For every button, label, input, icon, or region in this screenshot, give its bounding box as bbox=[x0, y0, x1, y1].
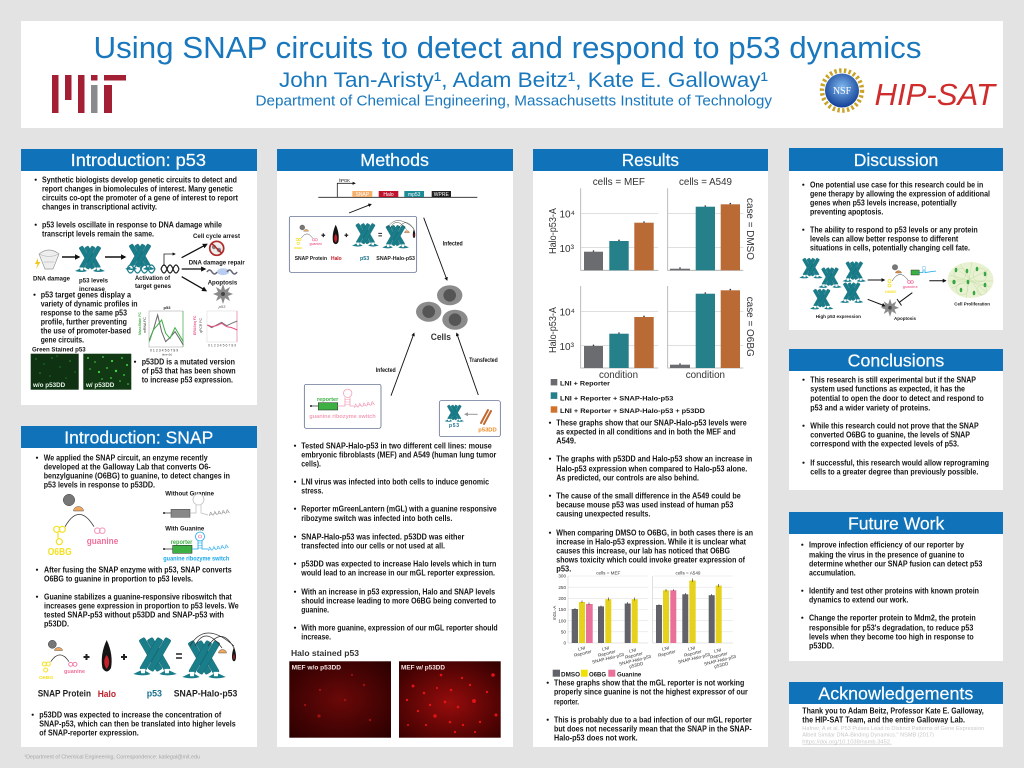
heading: Discussion bbox=[789, 148, 1003, 171]
text block: target genes: response to the same p53 bbox=[41, 308, 128, 318]
chart: mGL reporter bars: cells = A549 bbox=[676, 570, 701, 576]
pathway labels bbox=[33, 233, 245, 293]
text block: methods bullets: would lead to an increase in our mGL reporter expression. bbox=[300, 568, 495, 578]
panel: Conclusions bbox=[789, 349, 1003, 490]
text block: results bullets: These graphs show that our SNAP-Halo-p53 levels were bbox=[556, 418, 747, 428]
bars: O6BG row bbox=[584, 289, 740, 368]
text block: reference bbox=[802, 726, 984, 746]
legend: treatments: Guanine bbox=[617, 672, 641, 679]
text block: discussion bullets: The ability to respond to p53 levels or any protein bbox=[810, 226, 978, 234]
text block: conclusions bullets: While this research could not prove that the SNAP bbox=[810, 422, 979, 430]
chart: p53 versus ERASeq line chart: ERASeq FC bbox=[193, 315, 197, 335]
text block: p53DD expected bbox=[32, 710, 236, 738]
chart: Halo-p53 bars: Halo-p53-A bbox=[548, 208, 559, 254]
diagram: riboswitch states: With Guanine bbox=[165, 526, 204, 532]
image: MEF with p53DD bbox=[399, 661, 501, 738]
chart: mGL reporter bars: Reporter bbox=[710, 651, 729, 660]
box: p53DD: p53DD bbox=[478, 428, 497, 434]
text block: SNAP circuit: p53 levels in response to p53DD. bbox=[44, 480, 155, 490]
legend: conditions: LNI + Reporter + SNAP-Halo-p53 bbox=[560, 396, 674, 402]
text block: methods bullets: guanine. bbox=[301, 606, 329, 614]
panel: Introduction p53 bbox=[21, 149, 257, 405]
box: SNAP-Halo-p53 fusion: O6BG bbox=[294, 246, 303, 250]
authors: John Tan-Aristy¹, Adam Beitz¹, Kate E. Galloway¹ bbox=[279, 69, 768, 92]
text block: target genes: p53 target genes display a bbox=[41, 290, 132, 300]
text block: fusing and riboswitch bbox=[36, 566, 239, 628]
bars: MEF facet bbox=[572, 599, 638, 643]
diagram: SNAP converts O6BG to guanine bbox=[48, 494, 118, 558]
text block: conclusions bullets: If successful, this research would allow reprograming bbox=[810, 458, 989, 468]
chart: mGL reporter bars: Reporter bbox=[658, 649, 677, 658]
text block: reference: Albeit Similar DNA-Binding Dynamics." NSMB (2017) bbox=[802, 732, 934, 738]
chart: p53 versus MDM2 line chart: MascStain FC bbox=[138, 312, 142, 335]
text block: results bullets: The cause of the small difference in the A549 could be bbox=[556, 492, 741, 500]
heading: Discussion: Discussion bbox=[854, 150, 938, 170]
text block: reference: Hafner, A et al. P53 Pulses Lead to Distinct Patterns of Gene Expression bbox=[802, 726, 984, 732]
arrow: construct to protein bbox=[349, 204, 371, 213]
chart: p53 versus MDM2 line chart bbox=[138, 305, 183, 356]
chart: mGL reporter bars: LNI bbox=[578, 645, 586, 652]
label: Infected: Infected bbox=[443, 240, 463, 248]
chart: Halo-p53 bars bbox=[548, 177, 755, 381]
chart: mGL reporter bars: 100 bbox=[558, 618, 566, 623]
icon: apoptosis bbox=[881, 299, 899, 317]
text block: mGL reporter conclusions: reporter. bbox=[554, 698, 579, 706]
arrow: to cell cycle arrest bbox=[182, 244, 207, 258]
arrow: to DNA repair bbox=[182, 268, 205, 270]
chart: mGL reporter bars: SNAP-Halo-p53 bbox=[619, 654, 652, 667]
text block: p53DD definition: to increase p53 expression. bbox=[142, 376, 233, 384]
panel: Methods bbox=[277, 149, 513, 747]
text block: future work bullets: making the virus in the presence of guanine to bbox=[809, 550, 965, 560]
footnote: ¹Department of Chemical Engineering, Correspondence: katiegal@mit.edu bbox=[24, 754, 200, 760]
legend: conditions: LNI + Reporter + SNAP-Halo-p53 + p53DD bbox=[560, 408, 705, 415]
text block: intro bullets top bbox=[35, 176, 238, 238]
diagram: plasmid construct: WPRE bbox=[434, 192, 449, 198]
diagram: riboswitch states: AAAAA bbox=[207, 544, 229, 553]
text block: intro bullets top: report changes in biomolecules of interest. Many genetic bbox=[42, 184, 234, 194]
icon: DNA damage repair bbox=[207, 268, 237, 275]
chart: mGL reporter bars bbox=[552, 570, 738, 671]
chart: p53 versus MDM2 line chart: mRNA FC bbox=[143, 317, 147, 333]
icon: NSF logo: NSF bbox=[833, 86, 852, 97]
inhibition line bbox=[897, 293, 912, 306]
box: SNAP-Halo-p53 fusion: Halo bbox=[331, 256, 342, 262]
panel: Discussion bbox=[789, 148, 1003, 330]
diagram: riboswitch states: AAAAA bbox=[208, 509, 230, 518]
text block: methods bullets: LNI virus was infected into both cells to induce genomic bbox=[301, 478, 490, 486]
legend: treatments bbox=[553, 670, 641, 679]
text block: results bullets: A549. bbox=[556, 436, 576, 446]
diagram: plasmid construct: SNAP bbox=[355, 192, 370, 198]
text block: results bullets bbox=[549, 418, 753, 574]
header panel bbox=[21, 21, 1003, 128]
heading: Introduction SNAP: Introduction: SNAP bbox=[64, 428, 213, 448]
diagram: SNAP converts O6BG to guanine: guanine bbox=[87, 536, 118, 547]
heading: Acknowledgements bbox=[789, 682, 1003, 704]
text block: future work bullets: levels when they become too high in response to bbox=[809, 632, 974, 642]
text block: methods bullets bbox=[294, 442, 498, 642]
text block: intro bullets top: circuits co-opt the promoter of a gene of interest to report bbox=[42, 194, 238, 202]
pathway labels: increase bbox=[79, 286, 105, 293]
panel: Acknowledgements bbox=[789, 682, 1003, 747]
diagram: p53 pathway bbox=[33, 233, 245, 304]
diagram: plasmid construct: Halo bbox=[383, 192, 394, 198]
text block: results bullets: increase in Halo-p53 expression. While it is unclear what bbox=[556, 538, 746, 546]
arrow: reporter infected bbox=[391, 333, 414, 396]
image: green stain with p53DD bbox=[83, 354, 131, 390]
text block: intro bullets top: changes in transcriptional activity. bbox=[42, 202, 157, 212]
text block: p53DD definition bbox=[134, 358, 236, 384]
box: p53DD: p53 bbox=[449, 423, 459, 429]
text block: discussion bullets: preventing apoptosis. bbox=[810, 208, 883, 216]
box: reporter: AAAAA bbox=[353, 401, 375, 410]
text block: results bullets: causing unexpected results. bbox=[556, 510, 650, 518]
pathway labels: target genes bbox=[135, 283, 171, 290]
diagram labels: Cell Proliferation bbox=[954, 302, 990, 306]
text block: target genes: profile, further preventing bbox=[41, 318, 127, 326]
chart: mGL reporter bars: SNAP-Halo-p53 bbox=[704, 654, 737, 667]
chart: p53 versus ERASeq line chart: qPCR FC bbox=[199, 318, 203, 333]
box: p53DD bbox=[439, 401, 500, 437]
text block: methods bullets: SNAP-Halo-p53 was infected. p53DD was either bbox=[301, 532, 464, 542]
text block: thanks bbox=[802, 706, 984, 724]
chart: mGL reporter bars: 200 bbox=[558, 596, 566, 601]
heading: Introduction SNAP bbox=[21, 426, 257, 448]
legend: conditions: LNI + Reporter bbox=[560, 380, 610, 388]
text block: intro bullets top: Synthetic biologists develop genetic circuits to detect and bbox=[42, 176, 237, 184]
chart: mGL reporter bars: mGL-A bbox=[552, 605, 557, 620]
text block: results bullets: causes this increase, our lab has noticed that O6BG bbox=[556, 546, 730, 556]
text block: conclusions bullets: system used functions as expected, it has the bbox=[810, 384, 966, 394]
panel: Results bbox=[533, 149, 768, 747]
diagram labels: Apoptosis bbox=[894, 316, 916, 321]
text block: fusing and riboswitch: O6BG to guanine in proportion to p53 levels. bbox=[44, 574, 193, 584]
bars: A549 facet bbox=[656, 580, 722, 643]
text block: methods bullets: With more guanine, expression of our mGL reporter should bbox=[301, 624, 498, 632]
arrow: to proliferation bbox=[929, 280, 946, 282]
heading: Conclusions bbox=[789, 349, 1003, 371]
text block: results bullets: p53. bbox=[556, 564, 571, 574]
icon: cell cycle arrest bbox=[210, 241, 224, 255]
chart: mGL reporter bars: 250 bbox=[558, 585, 566, 590]
text block: intro bullets top: transcript levels remain the same. bbox=[42, 230, 154, 238]
icon: cells: Cells bbox=[431, 332, 451, 342]
text block: results bullets: as expected in all conditions and in both the MEF and bbox=[556, 428, 736, 436]
diagram: riboswitch states bbox=[163, 490, 230, 562]
image: MEF without p53DD: MEF w/o p53DD bbox=[292, 666, 342, 672]
text block: reference: https://doi.org/10.1038/nsmb.3452. bbox=[802, 740, 892, 746]
diagram labels bbox=[816, 302, 990, 321]
text block: discussion bullets: levels can allow better response to different bbox=[810, 234, 959, 244]
text block: methods bullets: stress. bbox=[301, 486, 323, 496]
label: Halo stained p53: Halo stained p53 bbox=[291, 648, 359, 658]
box: reporter bbox=[304, 384, 381, 428]
icon: NSF logo bbox=[822, 70, 862, 110]
label: Transfected: Transfected bbox=[469, 357, 498, 364]
text block: p53DD definition: p53DD is a mutated version bbox=[142, 358, 235, 366]
chart: mGL reporter bars: Reporter bbox=[598, 649, 617, 658]
text block: discussion bullets bbox=[802, 180, 990, 252]
arrow: p53DD transfected bbox=[457, 333, 478, 395]
chart: p53 versus MDM2 line chart: 0 1 2 3 4 5 6 7 8 9 bbox=[150, 348, 178, 352]
text block: mGL reporter conclusions: properly since guanine is not the highest expressor of our bbox=[554, 688, 748, 696]
legend: conditions bbox=[551, 379, 705, 415]
text block: methods bullets: increase. bbox=[301, 632, 331, 642]
pathway labels: Activation of bbox=[135, 275, 171, 282]
text block: results bullets: When comparing DMSO to O6BG, in both cases there is an bbox=[556, 528, 753, 538]
text block: mGL reporter conclusions bbox=[547, 678, 752, 742]
icon: p53 tetramer bbox=[75, 246, 105, 272]
heading: Conclusions: Conclusions bbox=[848, 350, 945, 370]
chart: mGL reporter bars: SNAP-Halo-p53 bbox=[678, 652, 711, 665]
chart: Halo-p53 bars: condition bbox=[599, 370, 638, 381]
text block: results bullets: shows toxicity which could invoke greater expression of bbox=[556, 556, 745, 564]
text block: discussion bullets: gene therapy by allowing the expression of additional bbox=[810, 190, 990, 198]
pathway labels: Cell cycle arrest bbox=[193, 233, 241, 240]
diagram: SNAP plus Halo plus p53 fusion bbox=[38, 633, 237, 699]
text block: mGL reporter conclusions: These graphs show that the mGL reporter is not working bbox=[554, 678, 745, 688]
chart: Halo-p53 bars: 10⁴ bbox=[560, 308, 575, 319]
text block: fusing and riboswitch: increases gene expression in proportion to p53 levels. We bbox=[44, 602, 239, 610]
chart: mGL reporter bars: Reporter bbox=[625, 651, 644, 660]
text block: conclusions bullets: potential to open the door to detect and respond to bbox=[810, 394, 984, 403]
chart: p53 versus MDM2 line chart: time (h) bbox=[162, 352, 172, 356]
text block: methods bullets: transfected into our cells or not used at all. bbox=[301, 542, 445, 550]
text block: target genes bbox=[33, 290, 138, 344]
text block: future work bullets: determine whether our SNAP fusion can detect p53 bbox=[809, 560, 983, 568]
panel: Future Work bbox=[789, 512, 1003, 661]
legend: treatments: DMSO bbox=[561, 672, 580, 679]
chart: p53 versus ERASeq line chart: p53 bbox=[218, 304, 226, 309]
icon: SNAP circuit: O6BG bbox=[885, 290, 896, 294]
text block: future work bullets: Improve infection efficiency of our reporter by bbox=[809, 540, 965, 550]
text block: discussion bullets: situations in cells, potentially changing cell fate. bbox=[810, 244, 970, 252]
icon: MIT logo bbox=[52, 75, 126, 113]
chart: Halo-p53 bars: Halo-p53-A bbox=[548, 307, 559, 353]
chart: Halo-p53 bars: cells = A549 bbox=[679, 177, 732, 188]
heading: Future Work bbox=[789, 512, 1003, 534]
affiliation: Department of Chemical Engineering, Massachusetts Institute of Technology bbox=[256, 94, 773, 110]
text block: p53DD expected: p53DD was expected to increase the concentration of bbox=[39, 710, 222, 720]
chart: Halo-p53 bars: 10³ bbox=[560, 244, 575, 255]
text block: p53DD definition: of p53 that has been shown bbox=[142, 366, 236, 376]
text block: methods bullets: Tested SNAP-Halo-p53 in two different cell lines: mouse bbox=[301, 442, 492, 450]
icon: cells bbox=[416, 285, 468, 342]
chart: mGL reporter bars: SNAP-Halo-p53 bbox=[592, 652, 625, 665]
chart: mGL reporter bars: LNI bbox=[714, 647, 722, 654]
text block: discussion bullets: genes when p53 levels increase, potentially bbox=[810, 198, 957, 208]
arrow: to SNAP circuit bbox=[868, 279, 884, 281]
diagram: riboswitch states: Without Guanine bbox=[165, 490, 214, 498]
image: green stain without p53DD bbox=[31, 354, 79, 390]
chart: mGL reporter bars: LNI bbox=[602, 645, 610, 652]
heading: Results: Results bbox=[622, 150, 679, 170]
text block: conclusions bullets: cells to a greater degree than previously possible. bbox=[810, 468, 978, 476]
image: MEF with p53DD: MEF w/ p53DD bbox=[401, 666, 446, 672]
text block: SNAP circuit: developed at the Galloway Lab that converts O6- bbox=[44, 462, 211, 472]
legend: treatments: O6BG bbox=[589, 672, 606, 679]
pathway labels: DNA damage repair bbox=[189, 260, 245, 266]
icon: SNAP circuit bbox=[885, 264, 936, 294]
label: Green Stained p53: Green Stained p53 bbox=[32, 346, 86, 354]
chart: Halo-p53 bars: cells = MEF bbox=[593, 177, 645, 188]
box: SNAP-Halo-p53 fusion: SNAP-Halo-p53 bbox=[376, 256, 415, 262]
text block: results bullets: As predicted, our controls are also behind. bbox=[556, 474, 699, 482]
text block: thanks: Thank you to Adam Beitz, Professor Kate E. Galloway, bbox=[802, 706, 984, 716]
text block: methods bullets: Reporter mGreenLantern (mGL) with a guanine responsive bbox=[301, 504, 497, 514]
chart: mGL reporter bars: 50 bbox=[561, 630, 566, 634]
chart: mGL reporter bars: 150 bbox=[558, 607, 566, 612]
text block: methods bullets: embryonic fibroblasts (MEF) and A549 (human lung tumor bbox=[301, 450, 496, 460]
heading: Future Work: Future Work bbox=[848, 513, 945, 533]
diagram: SNAP plus Halo plus p53 fusion: SNAP-Halo-p53 bbox=[174, 688, 237, 698]
chart: Halo-p53 bars: 10³ bbox=[560, 342, 575, 353]
arrow: to apoptosis bbox=[182, 277, 206, 291]
text block: methods bullets: With an increase in p53 expression, Halo and SNAP levels bbox=[301, 588, 496, 596]
bars: DMSO row bbox=[584, 203, 740, 270]
diagram: SNAP plus Halo plus p53 fusion: guanine bbox=[64, 669, 85, 675]
text block: future work bullets: responsible for p53's degradation, to reduce p53 bbox=[809, 624, 974, 632]
chart: mGL reporter bars: cells = MEF bbox=[596, 570, 621, 576]
text block: conclusions bullets: correspond with the expected levels of p53. bbox=[810, 440, 959, 448]
chart: mGL reporter bars: p53DD bbox=[714, 661, 729, 669]
arrow bbox=[62, 256, 79, 258]
diagram: riboswitch states: reporter bbox=[171, 539, 193, 546]
diagram: gene therapy outcome bbox=[799, 258, 994, 321]
icon: p53 on DNA bbox=[125, 244, 179, 273]
chart: mGL reporter bars: LNI bbox=[688, 645, 696, 652]
diagram: riboswitch states: guanine ribozyme switch bbox=[163, 556, 229, 562]
text block: SNAP circuit: We applied the SNAP circuit, an enzyme recently bbox=[44, 454, 208, 462]
diagram labels: High p53 expression bbox=[816, 314, 861, 320]
text block: methods bullets: should increase leading to more O6BG being converted to bbox=[301, 596, 496, 606]
text block: p53DD expected: SNAP-p53, which can then be translated into higher levels bbox=[39, 720, 236, 728]
image: MEF without p53DD bbox=[289, 661, 391, 738]
title: Using SNAP circuits to detect and respond to p53 dynamics bbox=[94, 30, 922, 65]
diagram: plasmid construct: mp53 bbox=[408, 192, 421, 198]
text block: intro bullets top: p53 levels oscillate in response to DNA damage while bbox=[42, 220, 223, 230]
diagram: SNAP plus Halo plus p53 fusion: p53 bbox=[147, 688, 162, 698]
arrow: infected to cells bbox=[424, 218, 447, 280]
logo: HIP-SAT: HIP-SAT bbox=[874, 77, 997, 112]
box: SNAP-Halo-p53 fusion: guanine bbox=[310, 242, 322, 246]
text block: target genes: variety of dynamic profiles in bbox=[41, 300, 138, 308]
icon: proliferating cells bbox=[948, 262, 994, 298]
diagram: SNAP plus Halo plus p53 fusion: Halo bbox=[98, 689, 116, 699]
text block: SNAP circuit: benzylguanine (O6BG) to guanine, to detect changes in bbox=[44, 472, 230, 480]
diagram: plasmid construct bbox=[318, 178, 477, 198]
text block: conclusions bullets: p53 and a wider variety of proteins. bbox=[810, 404, 930, 412]
box: SNAP-Halo-p53 fusion: p53 bbox=[360, 256, 369, 262]
diagram: SNAP plus Halo plus p53 fusion: SNAP Protein bbox=[38, 688, 91, 698]
text block: p53DD expected: of SNAP-reporter expression. bbox=[39, 728, 139, 738]
label: Infected: Infected bbox=[376, 367, 396, 374]
heading: Results bbox=[533, 149, 768, 171]
heading: Introduction p53: Introduction: p53 bbox=[71, 150, 206, 170]
chart: mGL reporter bars: Reporter bbox=[684, 649, 703, 658]
diagram: SNAP converts O6BG to guanine: O6BG bbox=[48, 546, 72, 558]
text block: fusing and riboswitch: tested SNAP-p53 without p53DD and SNAP-p53 with bbox=[44, 610, 224, 620]
box: SNAP-Halo-p53 fusion bbox=[289, 216, 417, 272]
pathway labels: DNA damage bbox=[33, 276, 70, 282]
image: green stain without p53DD: w/o p53DD bbox=[32, 382, 66, 389]
chart: Halo-p53 bars: case = DMSO bbox=[744, 198, 755, 260]
diagram: SNAP plus Halo plus p53 fusion: O6BG bbox=[39, 675, 54, 681]
heading: Methods bbox=[277, 149, 513, 171]
heading: Acknowledgements: Acknowledgements bbox=[818, 683, 974, 703]
text block: future work bullets: Change the reporter protein to Mdm2, the protein bbox=[809, 614, 976, 622]
chart: mGL reporter bars: Reporter bbox=[574, 649, 593, 658]
icon: apoptosis bbox=[213, 284, 233, 304]
panel: Introduction SNAP bbox=[21, 426, 257, 747]
chart: mGL reporter bars: 300 bbox=[558, 574, 566, 579]
text block: target genes: the use of promoter-based bbox=[41, 326, 131, 336]
text block: SNAP circuit bbox=[36, 454, 230, 490]
box: SNAP-Halo-p53 fusion: SNAP Protein bbox=[295, 256, 328, 262]
icon: high p53 tetramers bbox=[799, 258, 866, 309]
chart: Halo-p53 bars: 10⁴ bbox=[560, 210, 575, 221]
text block: discussion bullets: One potential use case for this research could be in bbox=[810, 180, 984, 190]
text block: mGL reporter conclusions: This is probably due to a bad infection of our mGL reporter bbox=[554, 716, 752, 724]
box: reporter: reporter bbox=[317, 397, 339, 403]
chart: mGL reporter bars: LNI bbox=[662, 645, 670, 652]
text block: results bullets: The graphs with p53DD and Halo-p53 show an increase in bbox=[556, 454, 753, 464]
text block: results bullets: Halo-p53 expression when compared to Halo-p53 alone. bbox=[556, 464, 747, 474]
diagram: plasmid construct: hPGK bbox=[339, 178, 350, 183]
text block: methods bullets: p53DD was expected to increase Halo levels which in turn bbox=[301, 560, 497, 568]
text block: methods bullets: ribozyme switch was infected into both cells. bbox=[301, 514, 452, 523]
chart: Halo-p53 bars: condition bbox=[686, 370, 725, 381]
text block: future work bullets: p53DD. bbox=[809, 642, 834, 650]
arrow bbox=[105, 256, 125, 258]
text block: conclusions bullets: converted O6BG to guanine, the levels of SNAP bbox=[810, 430, 970, 440]
arrow: to apoptosis bbox=[868, 299, 885, 306]
heading: Introduction p53 bbox=[21, 149, 257, 171]
icon: SNAP circuit: guanine bbox=[903, 285, 918, 289]
pathway labels: p53 levels bbox=[79, 278, 108, 284]
text block: mGL reporter conclusions: Halo-p53 does not work. bbox=[554, 734, 638, 742]
text block: thanks: the HIP-SAT Team, and the entire Galloway Lab. bbox=[802, 716, 965, 724]
text block: methods bullets: cells). bbox=[301, 460, 321, 468]
chart: mGL reporter bars: 0 bbox=[563, 641, 566, 646]
text block: fusing and riboswitch: Guanine stabilizes a guanine-responsive riboswitch that bbox=[44, 592, 232, 602]
chart: p53 versus MDM2 line chart: p53 bbox=[164, 305, 171, 310]
icon: DNA damage bbox=[35, 250, 59, 269]
text block: results bullets: because mouse p53 was used instead of human p53 bbox=[556, 500, 734, 510]
chart: Halo-p53 bars: case = O6BG bbox=[744, 297, 755, 357]
text block: future work bullets: dynamics to extend our work. bbox=[809, 596, 908, 604]
box: reporter: guanine ribozyme switch bbox=[309, 414, 376, 420]
image: green stain with p53DD: w/ p53DD bbox=[85, 382, 115, 389]
text block: future work bullets bbox=[801, 540, 983, 650]
text block: fusing and riboswitch: p53DD. bbox=[44, 620, 69, 628]
text block: mGL reporter conclusions: but does not necessarily mean that the SNAP in the SNAP- bbox=[554, 724, 752, 734]
chart: p53 versus ERASeq line chart bbox=[193, 304, 237, 348]
text block: future work bullets: accumulation. bbox=[809, 568, 856, 578]
chart: mGL reporter bars: LNI bbox=[629, 647, 637, 654]
pathway labels: Apoptosis bbox=[208, 280, 237, 286]
text block: conclusions bullets: This research is still experimental but if the SNAP bbox=[810, 376, 976, 384]
text block: fusing and riboswitch: After fusing the SNAP enzyme with p53, SNAP converts bbox=[44, 566, 232, 574]
heading: Methods: Methods bbox=[360, 150, 429, 170]
text block: future work bullets: Identify and test other proteins with known protein bbox=[809, 586, 979, 596]
text block: target genes: gene circuits. bbox=[41, 336, 84, 344]
chart: mGL reporter bars: p53DD bbox=[629, 661, 644, 669]
chart: p53 versus ERASeq line chart: 0 1 2 3 4 5 6 7 8 9 bbox=[208, 344, 236, 348]
text block: conclusions bullets bbox=[802, 376, 989, 476]
